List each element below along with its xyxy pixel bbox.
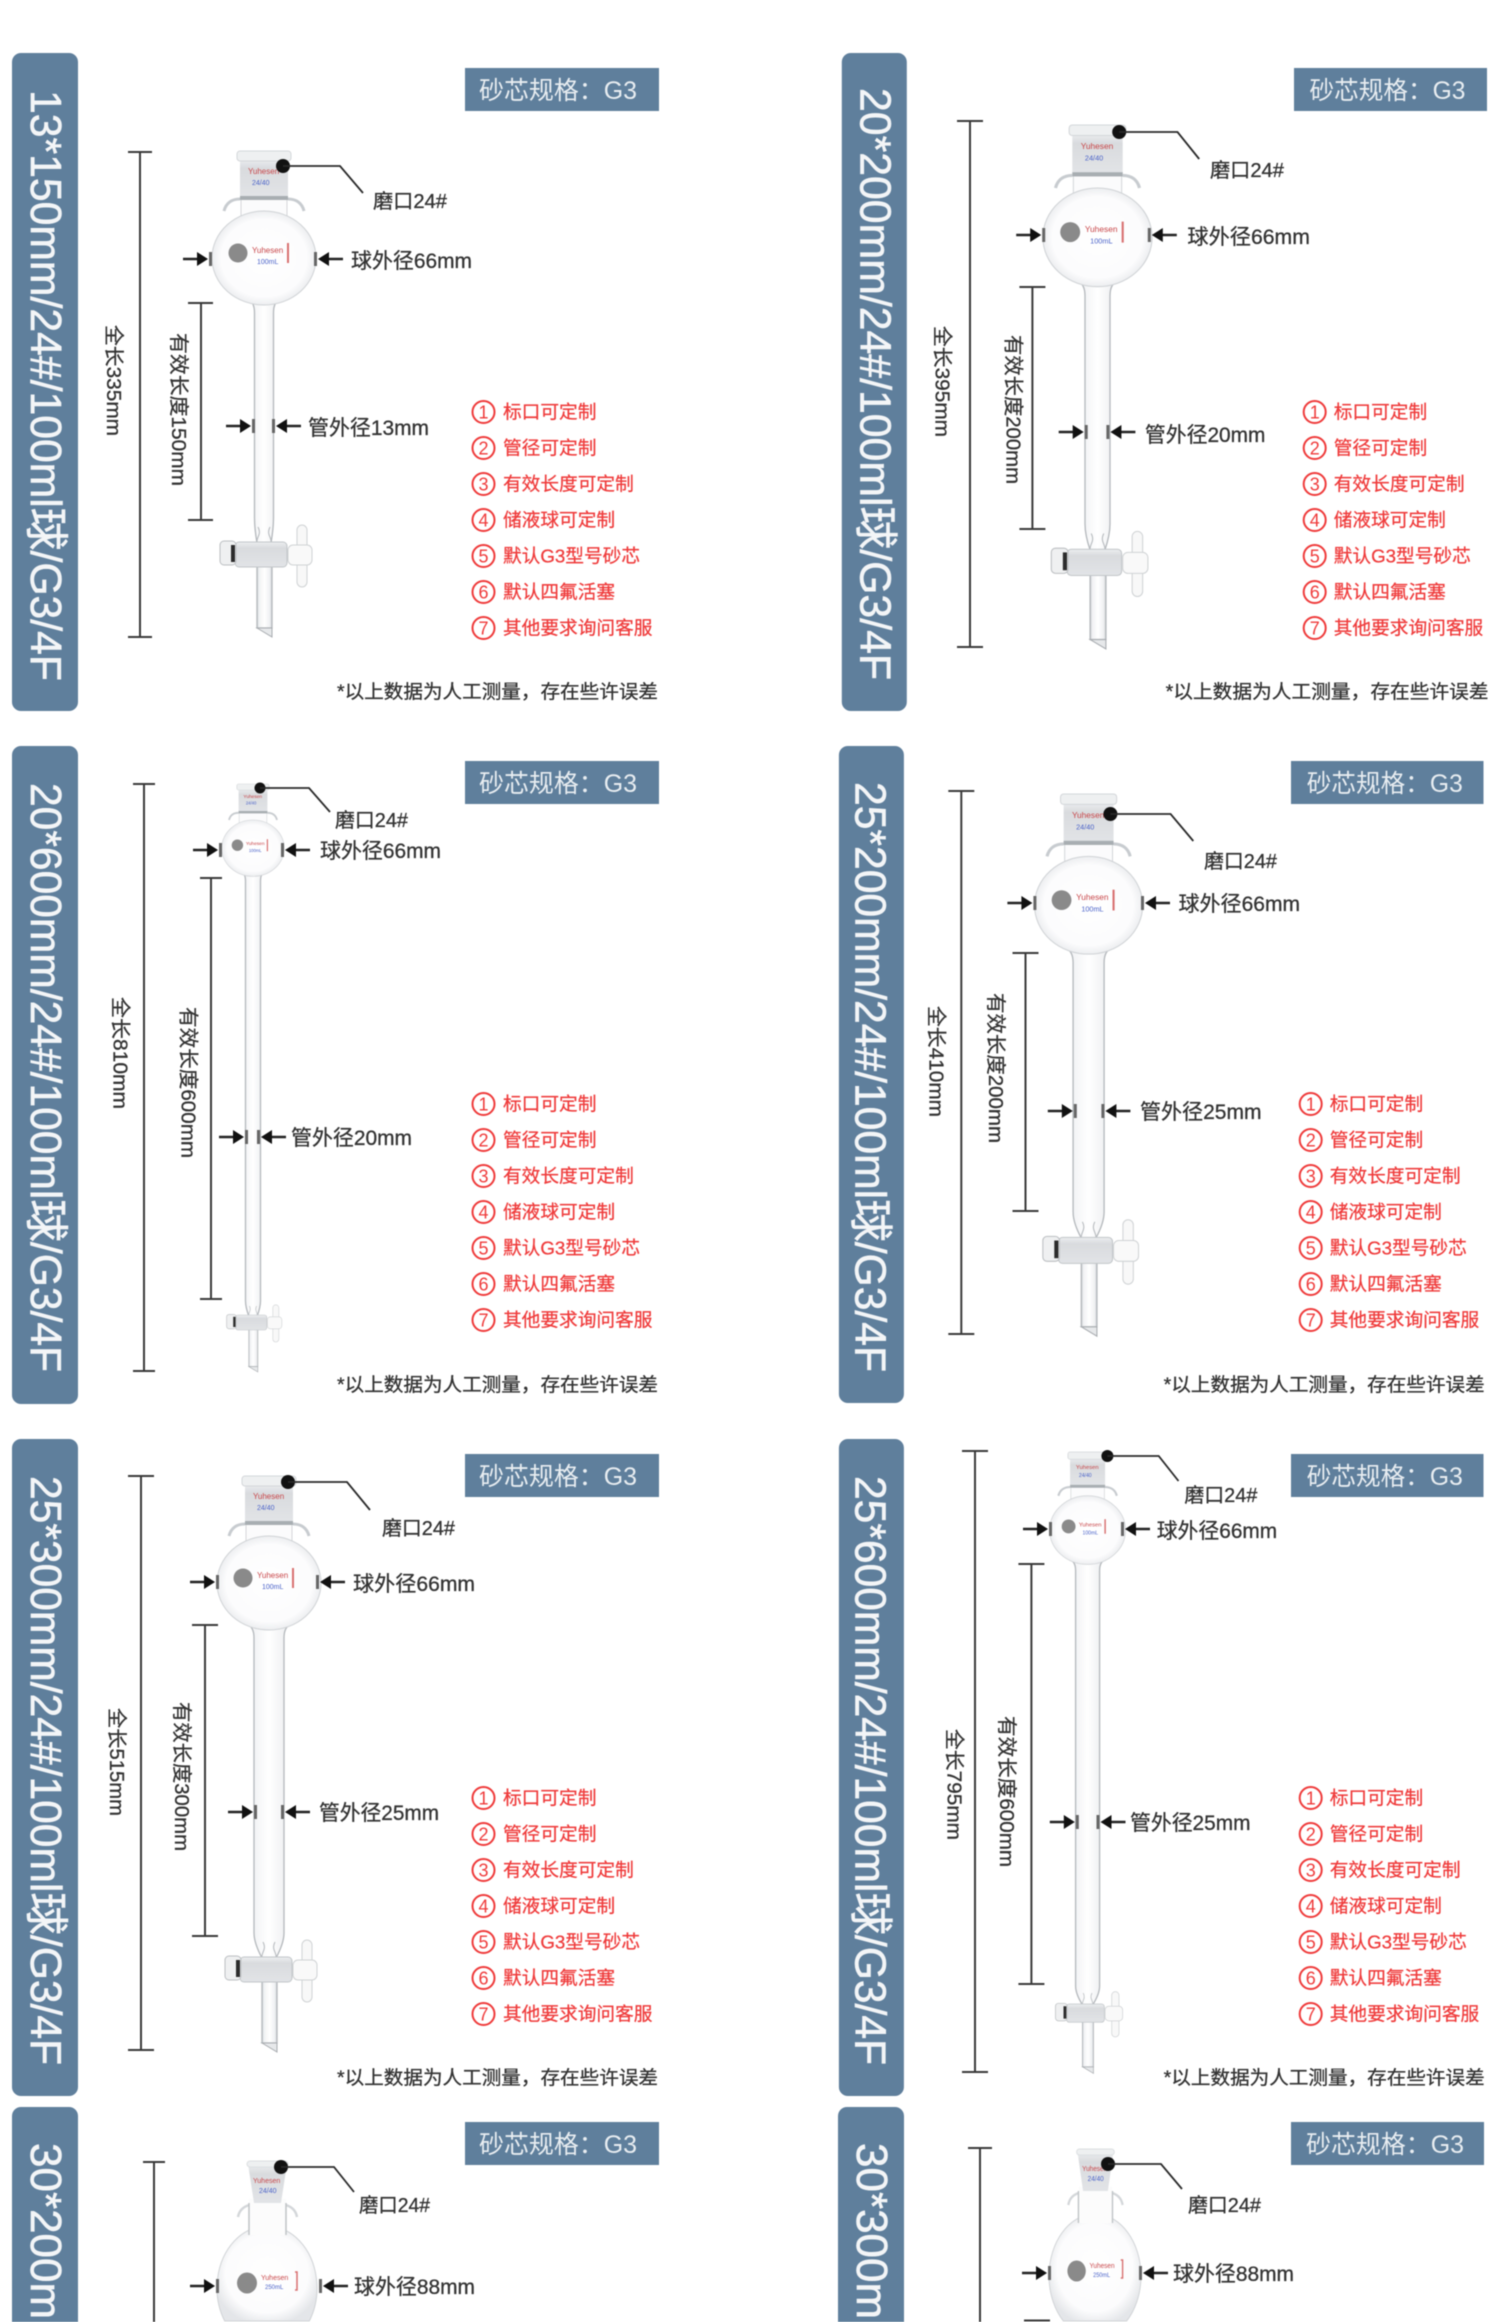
customisation list: 其他要求询问客服: [503, 2004, 653, 2024]
bulb diameter callout: [190, 1573, 475, 1596]
column flask: Yuhesen: [1076, 892, 1109, 902]
customisation list: [472, 1787, 653, 2025]
bulb diameter callout: 球外径88mm: [354, 2276, 475, 2299]
frit spec tag: 砂芯规格：G3: [1306, 2131, 1464, 2159]
effective length dimension: 有效长度200mm: [1002, 335, 1025, 484]
bulb diameter callout: [1022, 2263, 1294, 2286]
customisation list: 5: [1310, 546, 1320, 566]
sidebar title: 25*600mm/24#/100ml球/G3/4F: [846, 1476, 895, 2065]
overall length dimension: 全长795mm: [942, 1729, 966, 1840]
customisation list: 7: [478, 1310, 489, 1330]
overall length dimension: [105, 1476, 154, 2050]
overall length dimension: [968, 2148, 992, 2322]
column flask: 100mL: [1090, 237, 1113, 246]
customisation list: 默认G3型号砂芯: [1330, 1238, 1467, 1258]
tube diameter callout: [226, 417, 429, 440]
effective length dimension: [984, 953, 1038, 1211]
column flask: 24/40: [246, 800, 257, 805]
sidebar title: [12, 1439, 78, 2096]
customisation list: 默认四氟活塞: [503, 1274, 615, 1294]
customisation list: 1: [478, 1094, 489, 1114]
tube diameter callout: 管外径20mm: [291, 1127, 412, 1150]
column flask: 24/40: [1076, 822, 1094, 831]
customisation list: 4: [1310, 510, 1320, 530]
customisation list: 5: [478, 546, 489, 566]
bulb diameter callout: [1016, 226, 1310, 249]
customisation list: 默认G3型号砂芯: [503, 546, 640, 566]
customisation list: 6: [478, 1274, 489, 1294]
effective length dimension: 有效长度300mm: [170, 1702, 193, 1851]
customisation list: [1300, 1093, 1480, 1331]
customisation list: 1: [1306, 1094, 1316, 1114]
customisation list: 管径可定制: [1330, 1824, 1423, 1844]
overall length dimension: 全长395mm: [931, 326, 954, 437]
effective length dimension: [995, 1564, 1044, 1984]
joint callout: [1101, 2157, 1262, 2217]
customisation list: 3: [1310, 474, 1320, 494]
customisation list: 2: [478, 438, 489, 458]
customisation list: 5: [478, 1932, 489, 1952]
customisation list: 储液球可定制: [1330, 1896, 1442, 1916]
joint callout: [254, 782, 409, 832]
customisation list: [1304, 401, 1484, 639]
customisation list: 储液球可定制: [503, 1202, 615, 1222]
customisation list: 3: [478, 474, 489, 494]
column flask: 100mL: [1081, 905, 1104, 914]
customisation list: 4: [1306, 1202, 1316, 1222]
tube diameter callout: 管外径25mm: [1140, 1101, 1262, 1124]
customisation list: 有效长度可定制: [1330, 1166, 1461, 1186]
panel: 20*200mm column: [842, 53, 1489, 711]
customisation list: 储液球可定制: [503, 1896, 615, 1916]
bulb diameter callout: [1007, 893, 1300, 916]
customisation list: 默认四氟活塞: [503, 582, 615, 602]
customisation list: 储液球可定制: [503, 510, 615, 530]
sidebar title: 20*200mm/24#/100ml球/G3/4F: [851, 88, 900, 680]
overall length dimension: [925, 791, 974, 1334]
frit spec tag: 砂芯规格：G3: [479, 770, 637, 798]
column flask: Yuhesen: [252, 246, 283, 255]
customisation list: 1: [478, 1788, 489, 1808]
customisation list: 2: [478, 1824, 489, 1844]
joint callout: 磨口24#: [335, 809, 409, 832]
sidebar title: [838, 2107, 904, 2322]
customisation list: 4: [478, 1202, 489, 1222]
pear flask: [217, 2161, 317, 2321]
pear flask: 250mL: [1093, 2273, 1110, 2279]
customisation list: 6: [478, 582, 489, 602]
column flask: Yuhesen: [257, 1571, 288, 1580]
pear flask: 24/40: [259, 2188, 277, 2195]
joint callout: 磨口24#: [1210, 159, 1285, 182]
overall length dimension: 全长810mm: [108, 997, 132, 1109]
customisation list: 默认G3型号砂芯: [503, 1238, 640, 1258]
customisation list: 5: [1306, 1238, 1316, 1258]
frit spec tag: [465, 2122, 659, 2165]
sidebar title: 20*600mm/24#/100ml球/G3/4F: [21, 783, 70, 1372]
panel: 30*300mm column (cropped): [838, 2107, 1484, 2322]
customisation list: 5: [1306, 1932, 1316, 1952]
frit spec tag: 砂芯规格：G3: [1307, 770, 1463, 798]
customisation list: 6: [478, 1968, 489, 1988]
customisation list: 标口可定制: [1334, 402, 1427, 422]
measurement note: *以上数据为人工测量，存在些许误差: [1164, 1374, 1485, 1396]
frit spec tag: [465, 761, 659, 804]
column flask: 100mL: [257, 259, 279, 266]
column flask: [1050, 1452, 1126, 2073]
sidebar title: [12, 746, 78, 1404]
frit spec tag: [1294, 68, 1487, 111]
customisation list: [1300, 1787, 1480, 2025]
customisation list: 其他要求询问客服: [1334, 618, 1484, 638]
overall length dimension: 全长410mm: [925, 1006, 948, 1117]
panel: 25*300mm column: [12, 1439, 659, 2096]
customisation list: 默认四氟活塞: [503, 1968, 615, 1988]
sidebar title: [12, 2107, 78, 2322]
bulb diameter callout: 球外径66mm: [351, 250, 472, 273]
customisation list: 其他要求询问客服: [1330, 2004, 1480, 2024]
customisation list: 管径可定制: [503, 1824, 596, 1844]
customisation list: 有效长度可定制: [503, 474, 634, 494]
customisation list: 标口可定制: [503, 1788, 596, 1808]
column flask: Yuhesen: [1085, 224, 1118, 234]
customisation list: 7: [1306, 2004, 1316, 2024]
tube diameter callout: [1048, 1101, 1262, 1124]
customisation list: 有效长度可定制: [503, 1860, 634, 1880]
frit spec tag: 砂芯规格：G3: [479, 77, 637, 105]
customisation list: 其他要求询问客服: [503, 1310, 653, 1330]
frit spec tag: 砂芯规格：G3: [1307, 1463, 1463, 1491]
pear flask: Yuhesen: [1089, 2263, 1115, 2270]
panel: 25*600mm column: [839, 1439, 1485, 2096]
customisation list: 默认四氟活塞: [1330, 1274, 1442, 1294]
bulb diameter callout: [193, 840, 441, 863]
joint callout: [274, 2160, 431, 2217]
measurement note: *以上数据为人工测量，存在些许误差: [1164, 2067, 1485, 2089]
customisation list: 管径可定制: [1334, 438, 1427, 458]
joint callout: [1101, 1450, 1258, 1507]
column flask: 100mL: [249, 848, 262, 853]
customisation list: 标口可定制: [1330, 1094, 1423, 1114]
effective length dimension: 有效长度150mm: [167, 333, 190, 486]
sidebar title: 25*300mm/24#/100ml球/G3/4F: [21, 1476, 70, 2065]
column flask: [222, 784, 284, 1372]
customisation list: 4: [478, 1896, 489, 1916]
overall length dimension: [143, 2162, 165, 2322]
column flask: [1043, 125, 1152, 649]
customisation list: 有效长度可定制: [1334, 474, 1465, 494]
effective length dimension: [170, 1625, 218, 1936]
column flask: 100mL: [262, 1584, 284, 1591]
customisation list: 储液球可定制: [1330, 1202, 1442, 1222]
customisation list: 7: [1306, 1310, 1316, 1330]
frit spec tag: 砂芯规格：G3: [479, 1463, 637, 1491]
customisation list: 有效长度可定制: [503, 1166, 634, 1186]
tube diameter callout: 管外径20mm: [1145, 424, 1265, 447]
customisation list: 标口可定制: [503, 1094, 596, 1114]
joint callout: [1112, 125, 1285, 182]
panel: 30*200mm column (cropped): [12, 2107, 659, 2322]
bulb diameter callout: 球外径66mm: [1187, 226, 1310, 249]
tube diameter callout: [1059, 424, 1265, 447]
column flask: Yuhesen: [253, 1492, 284, 1501]
bulb diameter callout: [183, 250, 472, 273]
effective length dimension: [1002, 287, 1045, 529]
customisation list: 标口可定制: [503, 402, 596, 422]
joint callout: [281, 1475, 456, 1540]
frit spec tag: [465, 68, 659, 111]
bulb diameter callout: [1023, 1520, 1277, 1543]
joint callout: 磨口24#: [1204, 850, 1278, 873]
customisation list: 默认G3型号砂芯: [1330, 1932, 1467, 1952]
column flask: 24/40: [252, 180, 270, 187]
column flask: 24/40: [1079, 1473, 1092, 1479]
pear flask: Yuhesen: [1082, 2166, 1107, 2173]
joint callout: 磨口24#: [373, 190, 448, 213]
customisation list: 默认四氟活塞: [1330, 1968, 1442, 1988]
tube diameter callout: 管外径13mm: [308, 417, 429, 440]
sidebar title: 13*150mm/24#/100ml球/G3/4F: [21, 90, 70, 681]
customisation list: 管径可定制: [503, 1130, 596, 1150]
effective length dimension: 有效长度600mm: [995, 1716, 1018, 1867]
measurement note: *以上数据为人工测量，存在些许误差: [337, 1374, 658, 1396]
customisation list: 2: [1310, 438, 1320, 458]
pear flask: 24/40: [1088, 2176, 1104, 2183]
pear flask: Yuhesen: [261, 2275, 288, 2282]
sidebar title: 25*200mm/24#/100ml球/G3/4F: [846, 782, 895, 1372]
customisation list: 5: [478, 1238, 489, 1258]
customisation list: 6: [1310, 582, 1320, 602]
overall length dimension: [942, 1451, 988, 2072]
frit spec tag: [465, 1454, 659, 1497]
joint callout: [1103, 807, 1278, 873]
bulb diameter callout: 球外径66mm: [353, 1573, 475, 1596]
measurement note: *以上数据为人工测量，存在些许误差: [337, 681, 658, 703]
tube diameter callout: [1050, 1812, 1250, 1835]
frit spec tag: [1291, 1454, 1484, 1497]
column flask: [1035, 794, 1143, 1336]
column flask: Yuhesen: [248, 167, 279, 176]
customisation list: [472, 401, 653, 639]
customisation list: 2: [1306, 1130, 1316, 1150]
panel: 13*150mm column: [12, 53, 659, 711]
effective length dimension: [176, 878, 222, 1299]
customisation list: 默认四氟活塞: [1334, 582, 1446, 602]
customisation list: 默认G3型号砂芯: [1334, 546, 1471, 566]
customisation list: 7: [478, 2004, 489, 2024]
joint callout: 磨口24#: [382, 1517, 456, 1540]
column flask: Yuhesen: [1076, 1465, 1099, 1471]
overall length dimension: 全长515mm: [105, 1708, 128, 1816]
sidebar title: 30*300m: [847, 2143, 896, 2319]
customisation list: 3: [1306, 1166, 1316, 1186]
frit spec tag: [1291, 2122, 1484, 2165]
customisation list: 其他要求询问客服: [503, 618, 653, 638]
customisation list: 3: [478, 1166, 489, 1186]
overall length dimension: 全长335mm: [102, 325, 125, 436]
customisation list: 1: [1306, 1788, 1316, 1808]
bulb diameter callout: 球外径66mm: [320, 840, 441, 863]
joint callout: 磨口24#: [1188, 2194, 1262, 2217]
bulb diameter callout: [190, 2276, 475, 2299]
customisation list: 7: [1310, 618, 1320, 638]
bulb diameter callout: 球外径66mm: [1157, 1520, 1277, 1543]
effective length dimension: 有效长度200mm: [984, 993, 1007, 1143]
sidebar title: [839, 746, 904, 1403]
customisation list: 1: [1310, 402, 1320, 422]
overall length dimension: [102, 152, 152, 637]
joint callout: [276, 159, 448, 213]
bulb diameter callout: 球外径66mm: [1178, 893, 1300, 916]
column flask: Yuhesen: [1072, 810, 1105, 820]
column flask: Yuhesen: [1081, 141, 1114, 151]
customisation list: 2: [478, 1130, 489, 1150]
tube diameter callout: [219, 1127, 412, 1150]
column flask: Yuhesen: [1079, 1522, 1102, 1528]
overall length dimension: [931, 121, 983, 647]
customisation list: 2: [1306, 1824, 1316, 1844]
effective length dimension cap: [1024, 2320, 1050, 2322]
sidebar title: [842, 53, 907, 711]
customisation list: 3: [1306, 1860, 1316, 1880]
customisation list: 1: [478, 402, 489, 422]
panel: 20*600mm column: [12, 746, 659, 1404]
effective length dimension: [167, 303, 213, 520]
sidebar title: [839, 1439, 904, 2096]
customisation list: 4: [1306, 1896, 1316, 1916]
column flask: 100mL: [1082, 1530, 1098, 1536]
joint callout: 磨口24#: [359, 2194, 431, 2217]
customisation list: 7: [478, 618, 489, 638]
customisation list: 4: [478, 510, 489, 530]
customisation list: 3: [478, 1860, 489, 1880]
customisation list: 标口可定制: [1330, 1788, 1423, 1808]
sidebar title: [12, 53, 78, 711]
column flask: 24/40: [1085, 154, 1103, 163]
effective length dimension: 有效长度600mm: [176, 1007, 200, 1158]
pear flask: [1049, 2149, 1141, 2321]
customisation list: 6: [1306, 1274, 1316, 1294]
measurement note: *以上数据为人工测量，存在些许误差: [1166, 681, 1489, 703]
pear flask: Yuhesen: [253, 2178, 280, 2185]
measurement note: *以上数据为人工测量，存在些许误差: [337, 2067, 658, 2089]
joint callout: 磨口24#: [1184, 1484, 1258, 1507]
sidebar title: 30*200m: [21, 2143, 70, 2319]
column flask: Yuhesen: [246, 841, 265, 847]
customisation list: 有效长度可定制: [1330, 1860, 1461, 1880]
customisation list: 储液球可定制: [1334, 510, 1446, 530]
tube diameter callout: [228, 1802, 439, 1825]
column flask: Yuhesen: [243, 794, 262, 800]
customisation list: 管径可定制: [1330, 1130, 1423, 1150]
column flask: [212, 151, 316, 637]
customisation list: 管径可定制: [503, 438, 596, 458]
overall length dimension: [108, 784, 155, 1371]
column flask: [217, 1476, 321, 2052]
customisation list: 默认G3型号砂芯: [503, 1932, 640, 1952]
frit spec tag: 砂芯规格：G3: [479, 2131, 637, 2159]
frit spec tag: [1291, 761, 1484, 804]
frit spec tag: 砂芯规格：G3: [1310, 77, 1466, 105]
bulb diameter callout: 球外径88mm: [1173, 2263, 1294, 2286]
tube diameter callout: 管外径25mm: [319, 1802, 439, 1825]
tube diameter callout: 管外径25mm: [1130, 1812, 1250, 1835]
column flask: 24/40: [257, 1505, 275, 1512]
customisation list: 其他要求询问客服: [1330, 1310, 1480, 1330]
panel: 25*200mm column: [839, 746, 1485, 1403]
customisation list: 6: [1306, 1968, 1316, 1988]
pear flask: 250mL: [265, 2285, 284, 2291]
customisation list: [472, 1093, 653, 1331]
